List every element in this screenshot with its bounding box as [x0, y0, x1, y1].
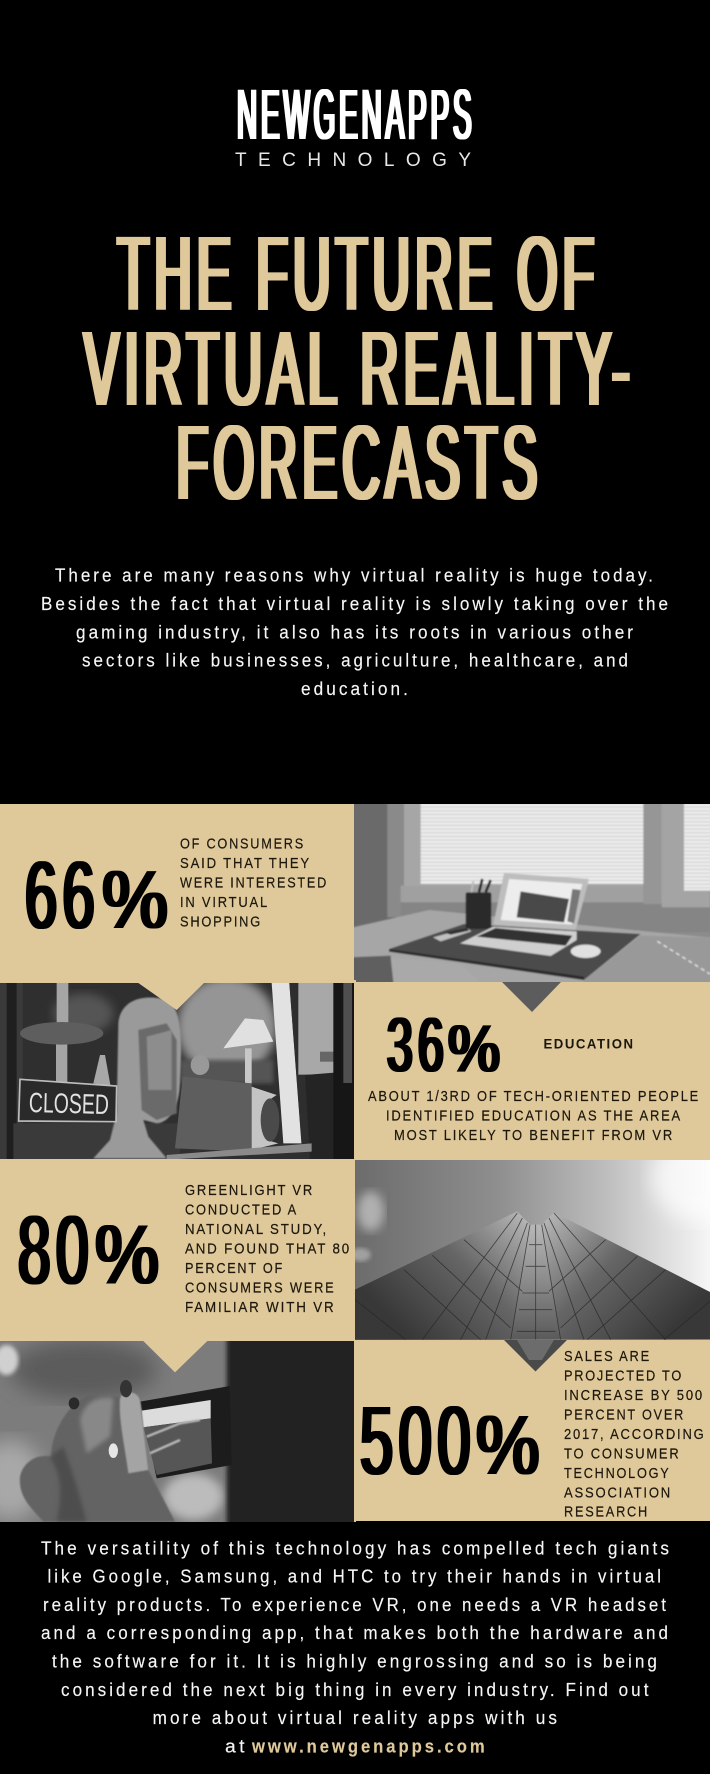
stat text 500%: PROJECTED TO: [564, 1369, 683, 1385]
intro text: There are many reasons why virtual reality is huge today.: [55, 566, 656, 586]
stat 80%: %: [95, 1207, 159, 1301]
sign: closed: [19, 1079, 117, 1122]
stat text 80%: GREENLIGHT VR: [185, 1183, 314, 1199]
stat text 80%: CONDUCTED A: [185, 1203, 298, 1219]
panel: 80 percent: [0, 1159, 355, 1341]
sign: closed: CLOSED: [29, 1087, 109, 1120]
stat text 66%: [180, 836, 328, 930]
stat 36%: 36: [387, 1003, 449, 1089]
closing text: at: [225, 1736, 248, 1756]
closing text: [41, 1538, 672, 1756]
stat 66%: %: [102, 853, 168, 946]
panel: 66 percent: [0, 804, 354, 982]
stat text 500%: [564, 1349, 706, 1521]
stat 500%: 500: [360, 1386, 476, 1495]
stat text 36%: MOST LIKELY TO BENEFIT FROM VR: [394, 1128, 674, 1144]
photo: hand holding phone: [0, 1333, 360, 1530]
stat text 66%: SAID THAT THEY: [180, 856, 311, 872]
stat text 80%: NATIONAL STUDY,: [185, 1222, 328, 1238]
arrow: tan pointer down: [143, 1341, 207, 1372]
stat text 500%: PERCENT OVER: [564, 1407, 685, 1423]
stat text 80%: PERCENT OF: [185, 1261, 284, 1277]
closing text: and a corresponding app, that makes both the hardware and: [41, 1623, 671, 1643]
photo: closed shop window: [0, 977, 356, 1162]
closing text: like Google, Samsung, and HTC to try their hands in virtual: [48, 1567, 664, 1587]
intro text: sectors like businesses, agriculture, healthcare, and: [82, 651, 631, 671]
stat text 66%: WERE INTERESTED: [180, 875, 328, 891]
stat 80%: 80: [18, 1195, 94, 1304]
closing text: the software for it. It is highly engrossing and so is being: [52, 1652, 660, 1672]
stat text 36%: IDENTIFIED EDUCATION AS THE AREA: [386, 1108, 682, 1124]
stat 36%: %: [448, 1012, 500, 1087]
stat text 80%: AND FOUND THAT 80: [185, 1241, 351, 1257]
photo: skyscraper: [355, 1160, 710, 1340]
stat text 500%: SALES ARE: [564, 1349, 651, 1365]
stat text 80%: CONSUMERS WERE: [185, 1280, 336, 1296]
stat 500%: %: [476, 1398, 540, 1492]
stat text 500%: RESEARCH: [564, 1505, 649, 1521]
stat text 80%: FAMILIAR WITH VR: [185, 1300, 336, 1316]
website link: www.newgenapps.com: [251, 1736, 488, 1756]
arrow: photo pointer down: [504, 1340, 567, 1372]
intro text: Besides the fact that virtual reality is slowly taking over the: [41, 594, 671, 614]
arrow: photo pointer down: [502, 982, 561, 1012]
closing text: more about virtual reality apps with us: [153, 1708, 560, 1728]
photo: laptop on desk: [351, 801, 710, 987]
stat text 500%: TECHNOLOGY: [564, 1466, 670, 1482]
stat text 500%: ASSOCIATION: [564, 1485, 672, 1501]
title: [84, 215, 635, 522]
stat text 36%: [368, 1089, 700, 1144]
logo: [235, 76, 476, 171]
arrow: tan pointer down: [138, 983, 204, 1010]
stat text 66%: IN VIRTUAL: [180, 895, 269, 911]
intro text: [41, 566, 671, 699]
panel: 500 percent: [355, 1340, 710, 1521]
stat 66%: 66: [25, 842, 100, 949]
intro text: gaming industry, it also has its roots in various other: [76, 622, 636, 642]
stat text 80%: [185, 1183, 351, 1316]
stat text 500%: TO CONSUMER: [564, 1446, 680, 1462]
panel: 36 percent: [354, 982, 710, 1160]
closing text: reality products. To experience VR, one needs a VR headset: [43, 1595, 669, 1615]
logo subtitle: TECHNOLOGY: [235, 150, 471, 171]
intro text: education.: [301, 679, 411, 699]
stat text 66%: OF CONSUMERS: [180, 836, 305, 852]
closing text: considered the next big thing in every industry. Find out: [61, 1680, 652, 1700]
stat heading education: EDUCATION: [544, 1036, 634, 1052]
closing text: The versatility of this technology has compelled tech giants: [41, 1538, 672, 1558]
stat text 66%: SHOPPING: [180, 914, 262, 930]
